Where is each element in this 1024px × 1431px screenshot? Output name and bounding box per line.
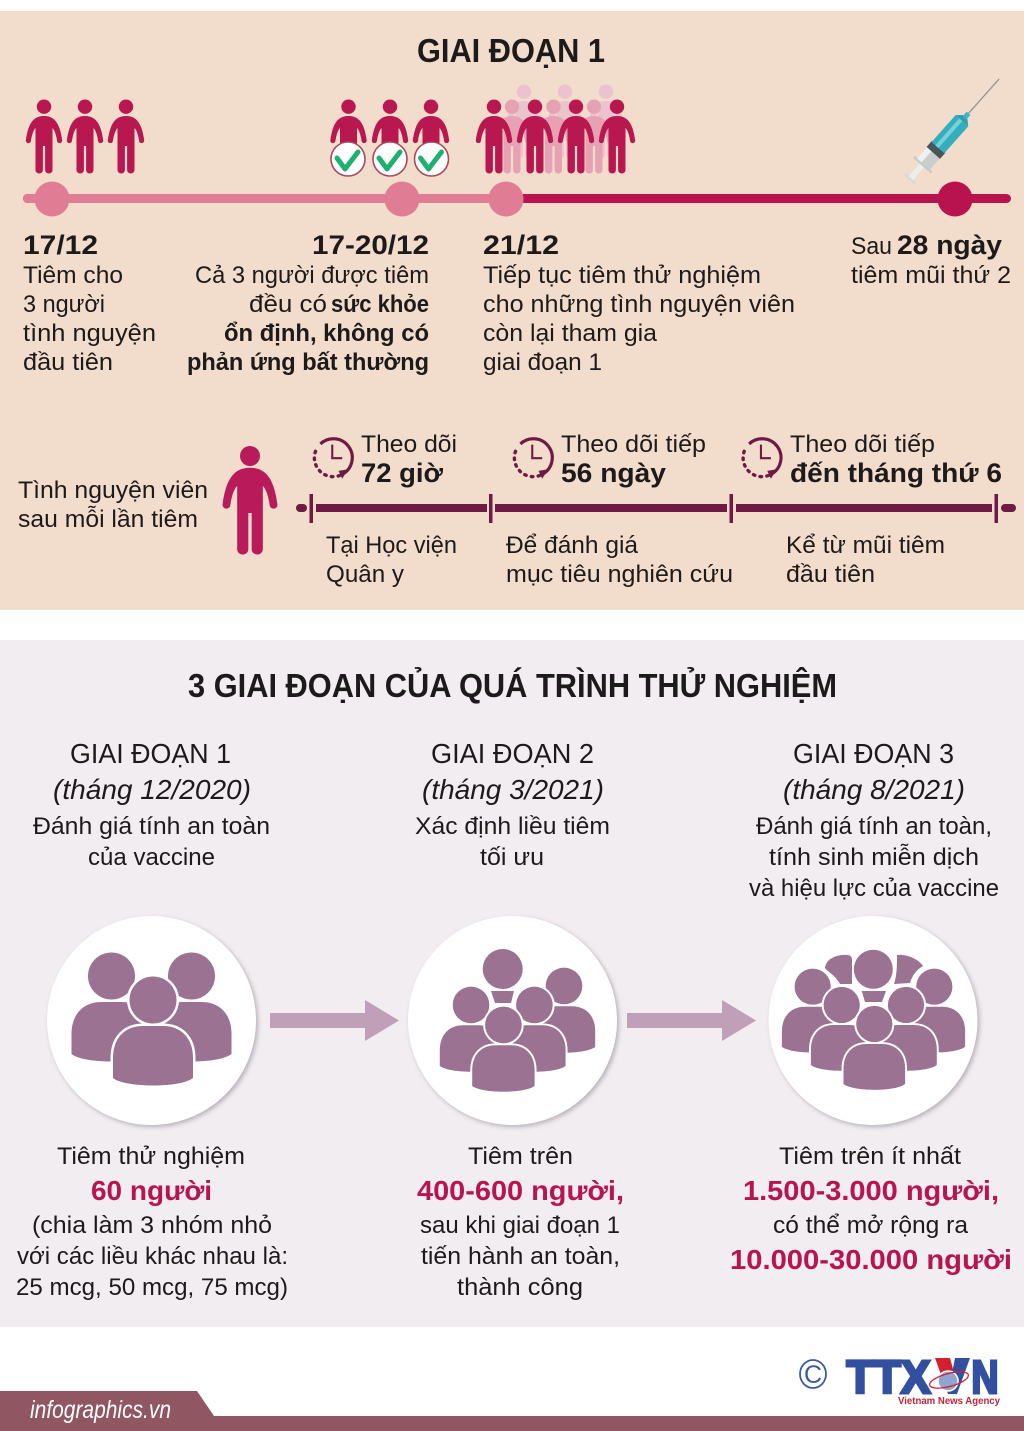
text block: stage 1 participants: [16, 1143, 288, 1301]
text block: stage 1 participants: (chia làm 3 nhóm nhỏ: [32, 1212, 272, 1239]
text block: sau 28 ngày: tiêm mũi thứ 2: [851, 262, 1011, 289]
text block: stage 3 participants: 10.000-30.000 người: [730, 1244, 1012, 1275]
text block: 17-20/12: 17-20/12: [312, 230, 429, 260]
icon: stage 3 large group: [768, 916, 980, 1127]
logo: TTXVN: [846, 1351, 1000, 1407]
text block: stage 1 description: của vaccine: [88, 844, 215, 871]
text block: stage 2 participants: [417, 1143, 624, 1301]
text: follow until month 6: đến tháng thứ 6: [790, 458, 1002, 488]
icon: group of remaining volunteers: [476, 84, 635, 174]
text block: stage 3 description: (tháng 8/2021): [783, 774, 965, 805]
text block: 17/12: 17/12: [23, 230, 98, 260]
panel: 3 giai đoạn: [0, 640, 1024, 1327]
text block: 21/12: 21/12: [483, 230, 559, 260]
text block: stage 1 description: (tháng 12/2020): [53, 774, 251, 805]
icon: copyright: C: [804, 1361, 822, 1389]
text: to assess research goals: mục tiêu nghiên cứu: [506, 561, 733, 588]
text: follow 72 hours: 72 giờ: [361, 458, 444, 488]
text block: stage 2 description: [415, 738, 610, 871]
text block: stage 2 participants: thành công: [457, 1274, 583, 1301]
icon: copyright: [800, 1360, 826, 1389]
text block: 17/12: đầu tiên: [23, 349, 113, 376]
icon: stage 2 medium group: [408, 916, 619, 1127]
text block: 17-20/12: đều có: [249, 291, 327, 318]
text block: stage 3 description: GIAI ĐOẠN 3: [793, 738, 954, 769]
text block: 21/12: Tiếp tục tiêm thử nghiệm: [483, 262, 761, 289]
icon: stage 1 small group: [47, 916, 258, 1127]
text block: stage 1 participants: Tiêm thử nghiệm: [57, 1143, 245, 1170]
text block: sau 28 ngày: 28 ngày: [897, 230, 1002, 260]
text: follow 56 days: Theo dõi tiếp: [561, 431, 706, 458]
text: to assess research goals: [506, 532, 733, 588]
text block: stage 2 participants: 400-600 người,: [417, 1175, 624, 1206]
text block: stage 3 participants: [730, 1143, 1012, 1275]
text block: sau 28 ngày: [851, 230, 1011, 289]
panel: giai đoạn 1: [0, 11, 1024, 610]
text: from the first injection: đầu tiên: [786, 561, 875, 588]
text block: 21/12: còn lại tham gia: [483, 320, 657, 347]
icon: clock 6 months: [743, 439, 781, 479]
icon: first three volunteers: [26, 100, 144, 174]
text block: stage 1 participants: với các liều khác nhau là:: [17, 1243, 288, 1270]
logo: TTXVN: TTX: [846, 1351, 931, 1403]
text: follow until month 6: [790, 431, 1002, 488]
text block: stage 3 description: tính sinh miễn dịch: [769, 844, 979, 871]
text: source site: infographics.vn: [30, 1396, 171, 1424]
text: volunteers after each injection: [18, 477, 208, 533]
text block: 17/12: Tiêm cho: [23, 262, 123, 289]
icon: volunteer: [223, 446, 277, 555]
text block: stage 2 participants: tiến hành an toàn,: [421, 1243, 620, 1270]
heading: giai đoạn 1: GIAI ĐOẠN 1: [417, 32, 605, 69]
text: from the first injection: Kể từ mũi tiêm: [786, 532, 945, 559]
text: follow 56 days: [561, 431, 706, 488]
logo: TTXVN: Vietnam News Agency: [898, 1396, 1000, 1407]
text block: stage 2 participants: sau khi giai đoạn 1: [420, 1212, 620, 1239]
text block: stage 3 participants: có thể mở rộng ra: [773, 1212, 968, 1239]
text block: stage 3 participants: Tiêm trên ít nhất: [779, 1143, 961, 1170]
text block: stage 1 participants: 25 mcg, 50 mcg, 75 mcg): [16, 1274, 288, 1301]
text: from the first injection: [786, 532, 945, 588]
text block: stage 2 description: (tháng 3/2021): [422, 774, 604, 805]
icon: clock 56 days: [514, 439, 552, 479]
text block: 17-20/12: ổn định, không có: [224, 320, 429, 347]
arrow: stage 2 to 3: [627, 1000, 756, 1041]
text: volunteers after each injection: Tình nguyện viên: [18, 477, 208, 504]
text block: stage 2 participants: Tiêm trên: [468, 1143, 573, 1170]
text: follow 72 hours: Theo dõi: [361, 431, 457, 458]
text block: 17-20/12: sức khỏe: [331, 291, 429, 318]
text block: stage 2 description: tối ưu: [480, 844, 544, 871]
text: follow until month 6: Theo dõi tiếp: [790, 431, 935, 458]
text block: 21/12: cho những tình nguyện viên: [483, 291, 795, 318]
timeline: follow-up: [296, 494, 1016, 523]
text block: 17-20/12: phản ứng bất thường: [187, 349, 429, 376]
icon: clock 72 hours: [314, 439, 352, 479]
heading: 3 stages: 3 GIAI ĐOẠN CỦA QUÁ TRÌNH THỬ NGHIỆM: [188, 667, 837, 704]
text block: 17-20/12: Cả 3 người được tiêm: [195, 262, 429, 289]
text block: 17-20/12: [187, 230, 429, 376]
text: volunteers after each injection: sau mỗi lần tiêm: [18, 506, 198, 533]
text block: 21/12: [483, 230, 795, 376]
text block: stage 1 description: Đánh giá tính an toàn: [33, 813, 270, 840]
text: to assess research goals: Để đánh giá: [506, 532, 638, 559]
timeline: main stages: [23, 182, 1011, 216]
text: at the military academy: Tại Học viện: [326, 532, 457, 559]
text block: stage 1 description: [33, 738, 270, 871]
text block: stage 1 participants: 60 người: [91, 1175, 212, 1206]
arrow: stage 1 to 2: [270, 1000, 399, 1041]
text block: 21/12: giai đoạn 1: [483, 349, 602, 376]
text block: stage 2 description: GIAI ĐOẠN 2: [431, 738, 594, 769]
text block: stage 3 participants: 1.500-3.000 người,: [743, 1175, 999, 1206]
text block: 17/12: 3 người: [23, 291, 105, 318]
text block: sau 28 ngày: Sau: [851, 233, 892, 260]
icon: syringe: [900, 71, 1008, 188]
text: at the military academy: Quân y: [326, 561, 405, 588]
text block: stage 3 description: Đánh giá tính an toàn,: [756, 813, 992, 840]
text: at the military academy: [326, 532, 457, 588]
icon: three volunteers with check marks: [330, 100, 449, 176]
text: follow 72 hours: [361, 431, 457, 488]
footer: [0, 1351, 1024, 1431]
text block: stage 3 description: và hiệu lực của vaccine: [749, 875, 999, 902]
text block: stage 2 description: Xác định liều tiêm: [415, 813, 610, 840]
logo: TTXVN: N: [972, 1351, 998, 1403]
text block: 17/12: [23, 230, 156, 376]
text block: 17/12: tình nguyện: [23, 320, 156, 347]
text block: stage 3 description: [749, 738, 999, 902]
text block: stage 1 description: GIAI ĐOẠN 1: [70, 738, 231, 769]
text: follow 56 days: 56 ngày: [561, 458, 666, 488]
